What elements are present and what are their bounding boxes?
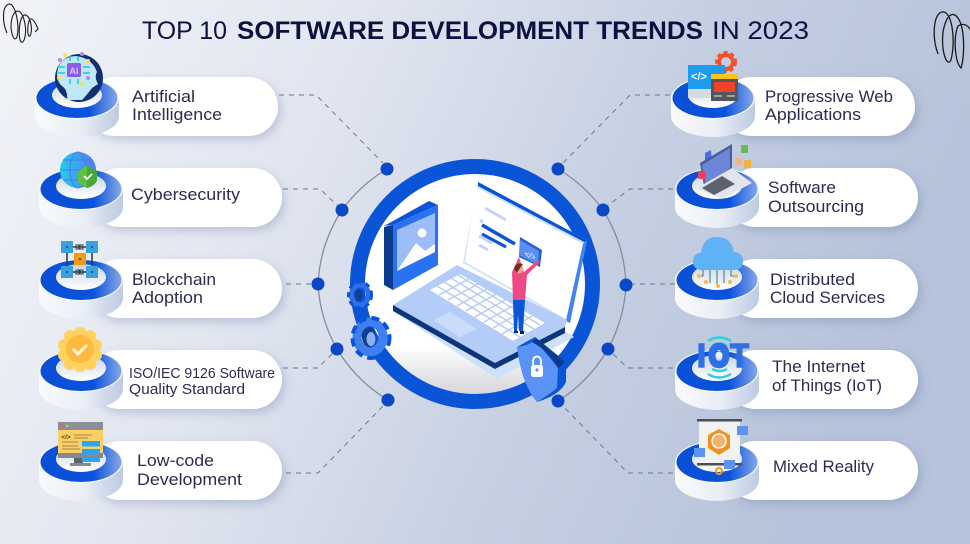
- icon: AI head: AI: [70, 66, 78, 76]
- item: Distributed Cloud Services: Distributed: [770, 271, 855, 289]
- laptop screen: [463, 182, 587, 323]
- title: SOFTWARE DEVELOPMENT TRENDS: [237, 17, 703, 45]
- item: Progressive Web Applications: [671, 52, 915, 137]
- item: The Internet of Things: of Things (IoT): [772, 377, 882, 395]
- icon: IoT: T: [730, 337, 749, 374]
- item: Mixed Reality: [675, 419, 918, 501]
- icon: AI head: [55, 52, 103, 102]
- item: Cybersecurity: Cybersecurity: [131, 186, 241, 204]
- icon: quality badge: [58, 327, 102, 372]
- item: Blockchain Adoption: [39, 241, 282, 319]
- icon: web app windows: </>: [691, 71, 707, 83]
- central illustration: laptop in ring: [348, 166, 592, 402]
- item: The Internet of Things: The Internet: [772, 358, 865, 376]
- decorative squiggle: right: [934, 12, 970, 68]
- picture frame: [384, 201, 438, 290]
- item: Blockchain Adoption: Blockchain: [132, 271, 216, 289]
- icon: web app windows: [688, 52, 738, 101]
- item: The Internet of Things: [675, 337, 918, 410]
- item: Software Outsourcing: [675, 144, 918, 228]
- item: Distributed Cloud Services: Cloud Services: [770, 289, 885, 307]
- dashed connectors: [279, 95, 675, 473]
- item: Progressive Web Applications: Applications: [765, 106, 861, 124]
- icon: code monitor: [58, 422, 103, 466]
- item: Blockchain Adoption: Adoption: [132, 289, 203, 307]
- item: Software Outsourcing: Software: [768, 179, 836, 197]
- icon: IoT: [697, 337, 749, 378]
- item: Artificial Intelligence: Artificial: [132, 88, 195, 106]
- decorative squiggle: left: [3, 4, 38, 42]
- icon: IoT: I: [697, 337, 706, 374]
- icon: laptop with tags: [697, 144, 752, 199]
- central hub: orbit arcs and nodes: [312, 162, 632, 408]
- item: ISO/IEC 9126 Software Quality Standard: Quality Standard: [129, 382, 245, 398]
- shield with lock: [517, 337, 566, 402]
- icon: code monitor: </>: [61, 434, 71, 441]
- icon: globe with shield: [60, 152, 97, 188]
- icon: IoT: O: [709, 338, 729, 373]
- item: Cybersecurity: [39, 152, 282, 228]
- icon: cloud network: [693, 237, 743, 288]
- title: [142, 17, 809, 45]
- title: TOP 10: [142, 17, 227, 45]
- item: Progressive Web Applications: Progressive Web: [765, 88, 893, 106]
- item: Low-code Development: Development: [137, 471, 242, 489]
- item: Distributed Cloud Services: [675, 237, 918, 319]
- item: Artificial Intelligence: Intelligence: [132, 106, 222, 124]
- gears: [348, 282, 390, 358]
- item: ISO/IEC 9126 Software Quality Standard: [39, 327, 282, 410]
- item: Mixed Reality: Mixed Reality: [773, 458, 875, 476]
- item: ISO/IEC 9126 Software Quality Standard: ISO/IEC 9126 Software: [129, 366, 275, 382]
- item: Low-code Development: Low-code: [137, 452, 214, 470]
- item: Artificial Intelligence: [35, 52, 278, 137]
- title: IN 2023: [712, 17, 809, 45]
- item: Low-code Development: [39, 422, 282, 501]
- item: Software Outsourcing: Outsourcing: [768, 198, 864, 216]
- person with code card: [512, 237, 542, 334]
- person with code card: </>: [523, 249, 537, 262]
- laptop base: [393, 265, 574, 379]
- icon: presentation board: [694, 419, 748, 474]
- icon: blockchain: [61, 241, 98, 278]
